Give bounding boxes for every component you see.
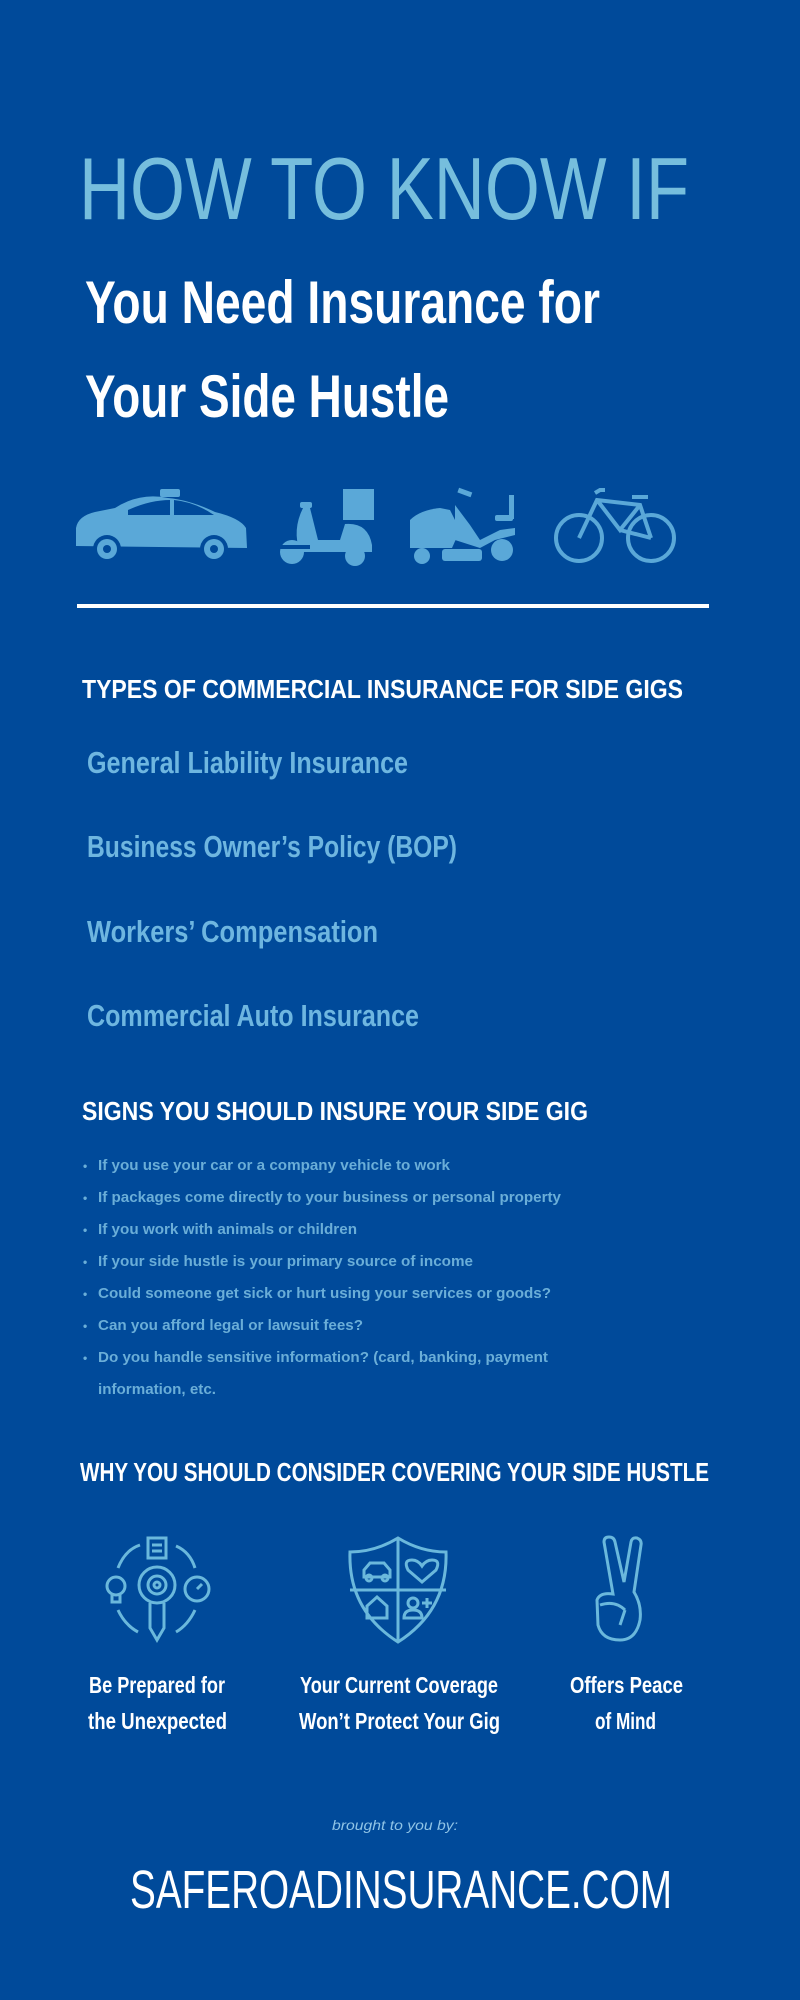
bullet list: signs: information, etc. — [98, 1382, 216, 1398]
icons: vehicles — [76, 488, 515, 566]
divider line — [77, 604, 709, 608]
list: insurance types: Commercial Auto Insurance — [87, 998, 419, 1033]
bullet list: signs: Do you handle sensitive information? (card, banking, payment — [98, 1350, 548, 1366]
bullet list: signs: If your side hustle is your primary source of income — [98, 1254, 473, 1270]
list: insurance types: Business Owner’s Policy (BOP) — [87, 829, 457, 864]
captions: Offers Peace — [570, 1672, 683, 1698]
bullet list: signs: • — [83, 1287, 87, 1301]
bullet list: signs: If you use your car or a company vehicle to work — [98, 1158, 451, 1174]
heading: types: TYPES OF COMMERCIAL INSURANCE FOR SIDE GIGS — [82, 674, 683, 704]
icon: bicycle — [556, 490, 674, 561]
icon: car — [76, 489, 247, 563]
icon: peace hand — [597, 1537, 641, 1640]
bullet list: signs — [83, 1158, 561, 1398]
captions: Be Prepared for — [89, 1672, 225, 1698]
bullet list: signs: Can you afford legal or lawsuit fees? — [98, 1318, 363, 1334]
bullet list: signs: If packages come directly to your business or personal property — [98, 1190, 561, 1206]
credit text: brought to you by: — [332, 1817, 458, 1833]
title line 2: Your Side Hustle — [85, 363, 449, 430]
list: insurance types: Workers’ Compensation — [87, 914, 378, 949]
heading: signs: SIGNS YOU SHOULD INSURE YOUR SIDE GIG — [82, 1096, 588, 1126]
bullet list: signs: If you work with animals or children — [98, 1222, 357, 1238]
icon: scooter — [280, 489, 374, 566]
bullet list: signs: • — [83, 1159, 87, 1173]
captions: Won’t Protect Your Gig — [299, 1708, 500, 1734]
title line 2: You Need Insurance for — [85, 269, 600, 336]
icon: shield — [350, 1538, 446, 1642]
list: insurance types: General Liability Insurance — [87, 745, 408, 780]
icon: mower — [410, 488, 515, 564]
bullet list: signs: • — [83, 1255, 87, 1269]
list: insurance types — [87, 745, 457, 1033]
bullet list: signs: Could someone get sick or hurt using your services or goods? — [98, 1286, 551, 1302]
captions — [88, 1672, 683, 1734]
captions: Your Current Coverage — [300, 1672, 498, 1698]
captions: the Unexpected — [88, 1708, 227, 1734]
bullet list: signs: • — [83, 1191, 87, 1205]
title line 2 — [85, 269, 600, 430]
captions: of Mind — [595, 1708, 656, 1734]
bullet list: signs: • — [83, 1319, 87, 1333]
bullet list: signs: • — [83, 1351, 87, 1365]
icon: gear pencil cycle — [107, 1538, 209, 1640]
bullet list: signs: • — [83, 1223, 87, 1237]
